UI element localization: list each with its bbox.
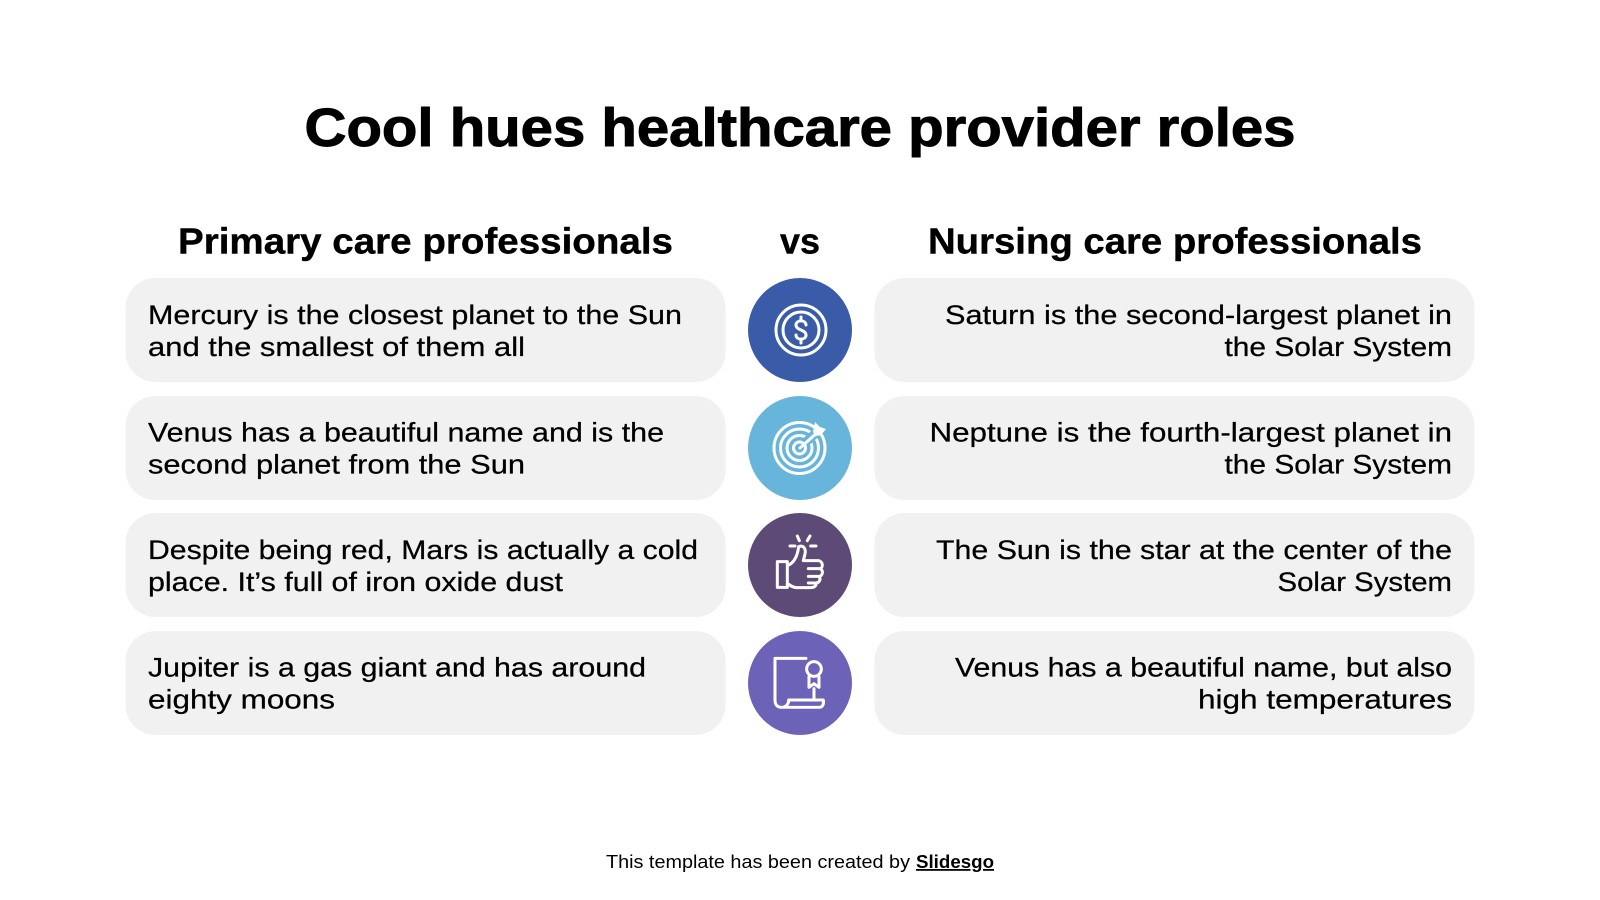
panel: Mercury bbox=[126, 278, 726, 382]
column heading: primary care: Primary care professionals bbox=[178, 220, 673, 262]
icon: scroll certificate bbox=[748, 631, 852, 735]
panel: The Sun: Solar System bbox=[1278, 567, 1452, 597]
footer credit: Slidesgo bbox=[916, 852, 994, 872]
vs heading: vs bbox=[780, 220, 820, 262]
row 3 bbox=[126, 513, 1474, 617]
column heading: nursing care: Nursing care professionals bbox=[928, 220, 1422, 262]
panel: Mars: Despite being red, Mars is actually a cold bbox=[148, 535, 698, 565]
panel: Saturn: the Solar System bbox=[1224, 332, 1452, 362]
panel: Mercury: and the smallest of them all bbox=[148, 332, 525, 362]
panel: Neptune bbox=[874, 396, 1474, 500]
panel: Saturn bbox=[874, 278, 1474, 382]
row 2 bbox=[126, 396, 1474, 500]
panel: Venus temperatures bbox=[874, 631, 1474, 735]
icon: target with arrow bbox=[748, 396, 852, 500]
panel: Mars bbox=[126, 513, 726, 617]
panel: Mercury: Mercury is the closest planet to the Sun bbox=[148, 300, 682, 330]
panel: Venus: Venus has a beautiful name and is the bbox=[148, 418, 664, 448]
row 4 bbox=[126, 631, 1474, 735]
icon: dollar coin bbox=[748, 278, 852, 382]
panel: Jupiter: eighty moons bbox=[148, 684, 335, 714]
panel: Neptune: the Solar System bbox=[1224, 450, 1452, 480]
panel: Mars: place. It’s full of iron oxide dust bbox=[148, 567, 564, 597]
panel: Saturn: Saturn is the second-largest planet in bbox=[945, 300, 1452, 330]
icon: thumbs up bbox=[748, 513, 852, 617]
panel: Venus: second planet from the Sun bbox=[148, 450, 525, 480]
panel: Jupiter bbox=[126, 631, 726, 735]
panel: The Sun bbox=[874, 513, 1474, 617]
panel: Venus temperatures: high temperatures bbox=[1198, 684, 1452, 714]
panel: Jupiter: Jupiter is a gas giant and has around bbox=[148, 652, 646, 682]
footer credit: This template has been created by bbox=[606, 852, 910, 872]
panel: Neptune: Neptune is the fourth-largest planet in bbox=[930, 418, 1452, 448]
panel: The Sun: The Sun is the star at the center of the bbox=[936, 535, 1452, 565]
row 1 bbox=[126, 278, 1474, 382]
panel: Venus bbox=[126, 396, 726, 500]
panel: Venus temperatures: Venus has a beautiful name, but also bbox=[955, 652, 1452, 682]
title: Cool hues healthcare provider roles bbox=[304, 98, 1296, 158]
